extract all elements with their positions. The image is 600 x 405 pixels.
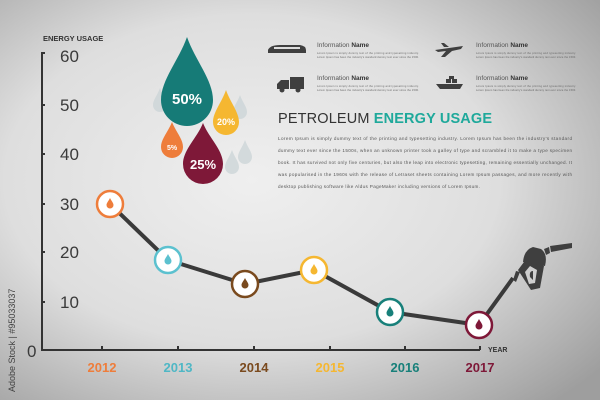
y axis labels: 20 xyxy=(60,243,79,262)
y axis labels: 60 xyxy=(60,47,79,66)
info item: plane xyxy=(435,42,576,59)
paragraph: was popularised in the 1960s with the release of Letraset sheets containing Lorem Ipsum passages, and more recently with xyxy=(278,172,572,177)
drop 50%: 50% xyxy=(172,91,202,108)
info item: plane: Lorem Ipsum is simply dummy text of the printing and typesetting industry. xyxy=(476,51,576,55)
year labels: 2017 xyxy=(466,360,494,375)
data point 2012 xyxy=(97,191,123,217)
data point 2016 xyxy=(377,299,403,325)
data point 2013 xyxy=(155,247,181,273)
data point 2014 xyxy=(232,271,258,297)
watermark id: Adobe Stock | #95033037 xyxy=(7,289,17,392)
y axis labels: 0 xyxy=(27,342,36,361)
icon: fuel nozzle xyxy=(513,243,572,290)
info item: truck: Lorem Ipsum is simply dummy text of the printing and typesetting industry. xyxy=(317,84,419,88)
info item: ship: Lorem Ipsum is simply dummy text of the printing and typesetting industry. xyxy=(476,84,576,88)
y axis labels: 10 xyxy=(60,293,79,312)
y axis labels: 30 xyxy=(60,195,79,214)
drop 5%: 5% xyxy=(167,145,178,152)
paragraph xyxy=(278,136,573,189)
paragraph: book. It has survived not only five centuries, but also the leap into electronic typesetting, remaining essentially unchanged. It xyxy=(278,160,573,165)
y axis labels: 40 xyxy=(60,145,79,164)
info item: ship xyxy=(436,75,576,92)
drop 25% xyxy=(183,123,223,184)
title: PETROLEUM ENERGY USAGE xyxy=(278,111,492,127)
drop 20% xyxy=(213,90,239,135)
info item: plane: Information Name xyxy=(476,42,528,49)
year labels: 2013 xyxy=(164,360,192,375)
info item: train: Information Name xyxy=(317,42,369,49)
info item: ship: Lorem Ipsum has been the industry's standard dummy text ever since the 1500. xyxy=(476,88,576,92)
info item: train: Lorem Ipsum is simply dummy text of the printing and typesetting industry. xyxy=(317,51,419,55)
info item: ship: Information Name xyxy=(476,75,528,82)
drops chart xyxy=(153,37,252,184)
year labels xyxy=(88,360,494,375)
paragraph: dummy text ever since the 1500s, when an unknown printer took a galley of type and scrambled it to make a type specimen xyxy=(278,148,572,153)
paragraph: Lorem Ipsum is simply dummy text of the printing and typesetting industry. Lorem Ipsum has been the industry's standard xyxy=(278,136,572,141)
drop 25%: 25% xyxy=(190,157,216,172)
year labels: 2012 xyxy=(88,360,116,375)
y axis xyxy=(42,53,480,350)
info item: plane: Lorem Ipsum has been the industry's standard dummy text ever since the 1500. xyxy=(476,55,576,59)
year labels: 2014 xyxy=(240,360,269,375)
drop 20%: 20% xyxy=(217,117,235,127)
line chart xyxy=(97,191,572,338)
info item: train xyxy=(268,42,419,59)
data point 2015 xyxy=(301,257,327,283)
y axis labels: 50 xyxy=(60,96,79,115)
info item: truck: Information Name xyxy=(317,75,369,82)
y axis labels xyxy=(27,47,79,361)
info item: truck xyxy=(277,75,419,92)
info item: truck: Lorem Ipsum has been the industry's standard dummy text ever since the 1500. xyxy=(317,88,419,92)
data point 2017 xyxy=(466,312,492,338)
axis title: ENERGY USAGE xyxy=(43,34,103,43)
year labels: 2016 xyxy=(391,360,419,375)
year labels: 2015 xyxy=(316,360,344,375)
x axis label: YEAR xyxy=(488,347,507,354)
drop 50% xyxy=(161,37,213,126)
info item: train: Lorem Ipsum has been the industry's standard dummy text ever since the 1500. xyxy=(317,55,419,59)
drop 5% xyxy=(161,122,183,158)
paragraph: desktop publishing software like Aldus PageMaker including versions of Lorem Ipsum. xyxy=(278,184,480,189)
